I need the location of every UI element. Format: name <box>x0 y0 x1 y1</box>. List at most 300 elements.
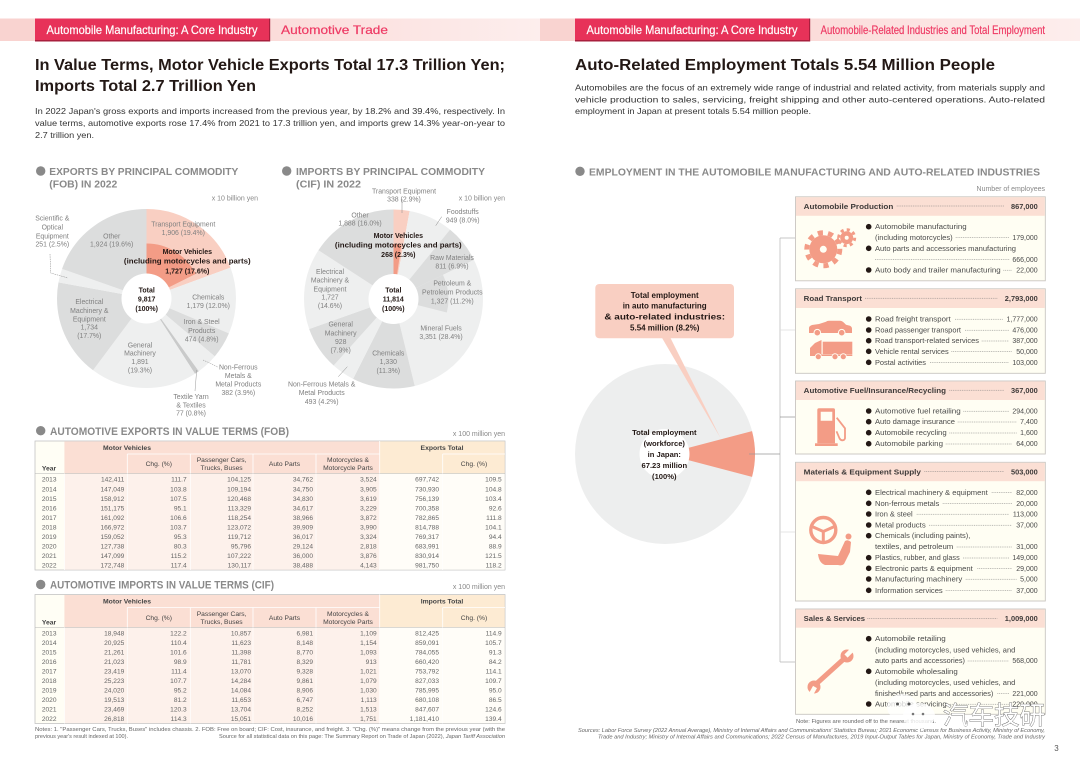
table: automotive exports: 172,748 <box>100 563 125 570</box>
icon: car <box>809 321 852 336</box>
watermark: 汽车技研 <box>943 702 1045 730</box>
table: automotive exports: 36,017 <box>293 534 313 541</box>
table: automotive imports: Trucks, Buses <box>201 619 243 626</box>
table: automotive imports: 1,030 <box>360 688 377 695</box>
table: automotive imports: 84.2 <box>489 659 502 666</box>
table: automotive exports: 814,788 <box>415 524 439 532</box>
table: automotive exports: 80.3 <box>174 544 187 551</box>
table: automotive imports: 6,747 <box>296 697 313 704</box>
table: automotive imports: Motor Vehicles <box>103 598 151 606</box>
table: automotive exports: 38,488 <box>293 563 313 570</box>
table: automotive imports: 1,113 <box>361 697 377 704</box>
unit: imports pie: x 10 billion yen <box>459 196 505 202</box>
table: automotive exports: 38,966 <box>293 515 313 522</box>
pie chart: exports: Scientific & <box>35 216 70 223</box>
table: automotive imports: 114.1 <box>486 669 502 676</box>
panel: road transport: 387,000 <box>1012 338 1038 345</box>
table: automotive imports: 18,948 <box>104 631 125 638</box>
connector lines to panels <box>749 238 795 662</box>
heading: automotive exports table <box>36 426 505 438</box>
panel: materials and equipment supply: Iron & steel <box>875 512 913 518</box>
intro text: right page: employment in Japan at present totals 5.54 million people. <box>575 107 811 116</box>
table: automotive imports: Year <box>42 619 57 626</box>
pie chart: imports: Petroleum Products <box>422 290 483 297</box>
table: automotive exports: 683,991 <box>415 544 439 551</box>
panel: sales and services: Automobile wholesaling <box>875 669 958 676</box>
table: automotive imports: 11,653 <box>231 697 251 704</box>
notes: left page: Notes: 1. "Passenger Cars, Trucks, Buses" includes chassis. 2. FOB: Free on board; CIF: Cost, insurance, and freight. 3. "Chg. (%)" means change from the previous year (with the <box>35 727 505 733</box>
pie chart: imports: (14.6%) <box>318 303 342 310</box>
table: automotive imports: 19,513 <box>104 697 125 704</box>
table: automotive exports: 121.5 <box>485 553 502 560</box>
table: automotive imports: Motorcycle Parts <box>323 619 374 626</box>
table: automotive imports: 10,857 <box>231 631 251 638</box>
table: automotive exports: 118.2 <box>486 563 502 570</box>
table: automotive exports: 2019 <box>42 534 57 541</box>
table: automotive imports: Auto Parts <box>269 615 301 622</box>
pie chart: exports: 1,924 (19.6%) <box>90 242 133 249</box>
heading: exports by principal commodity <box>36 166 238 190</box>
panel: materials and equipment supply: 37,000 <box>1016 522 1038 530</box>
table: automotive exports: 107.5 <box>170 496 187 503</box>
table: automotive exports: 111.7 <box>171 477 187 484</box>
heading: automotive imports table <box>36 580 505 592</box>
heading: employment section: EMPLOYMENT IN THE AUTOMOBILE MANUFACTURING AND AUTO-RELATED INDUSTRIES <box>589 166 1040 178</box>
table: automotive exports: 700,358 <box>415 505 439 512</box>
table: automotive exports: 161,092 <box>100 515 125 522</box>
table: automotive exports: 104.1 <box>485 524 502 532</box>
header band: left page: Automotive Trade <box>281 23 388 37</box>
pie chart: exports: Metal Products <box>215 381 262 388</box>
panel: road transport: Road freight transport <box>875 316 951 324</box>
table: automotive imports: 109.7 <box>485 678 502 685</box>
table: automotive exports: 95,796 <box>231 544 251 551</box>
unit: exports pie: x 10 billion yen <box>212 196 258 202</box>
table: automotive exports: 730,930 <box>415 486 439 493</box>
callout: auto employment total <box>595 284 734 438</box>
table: automotive exports: 2013 <box>42 477 57 484</box>
table: automotive exports: 107,222 <box>227 553 251 560</box>
panel: materials and equipment supply: Chemicals (including paints), <box>875 533 970 540</box>
panel: materials and equipment supply: Non-ferrous metals <box>875 501 940 508</box>
table: automotive exports: 2021 <box>42 553 57 560</box>
panel: automotive fuel, insurance, recycling: Automotive fuel retailing <box>875 408 961 416</box>
pie chart: exports: 382 (3.9%) <box>221 390 255 397</box>
panel: road transport: 476,000 <box>1012 328 1038 334</box>
table: automotive imports: 139.4 <box>485 716 502 723</box>
table: automotive exports: 120,468 <box>227 496 251 503</box>
icon: car seat <box>818 534 852 565</box>
title: left page: In Value Terms, Motor Vehicle Exports Total 17.3 Trillion Yen; <box>35 57 505 74</box>
pie chart: exports: 1,734 <box>81 325 98 332</box>
table: automotive imports: 2021 <box>42 707 57 714</box>
table: automotive imports: Imports Total <box>421 598 463 606</box>
table: automotive exports: 94.4 <box>489 534 502 541</box>
pie chart: imports: 1,727 <box>321 295 339 302</box>
table: automotive imports: 9,861 <box>296 678 313 685</box>
notes: left page <box>35 727 505 740</box>
table: automotive exports: Trucks, Buses <box>201 465 243 472</box>
table: automotive exports: 3,905 <box>360 486 377 493</box>
panel: automotive fuel, insurance, recycling: 1,600 <box>1020 430 1038 437</box>
panel: sales and services: 221,000 <box>1012 691 1038 698</box>
panel: road transport: 2,793,000 <box>1005 294 1038 303</box>
table: automotive imports: 91.3 <box>489 650 502 657</box>
table: automotive imports: 827,033 <box>415 678 439 685</box>
intro text: left page: value terms, automotive exports rose 17.4% from 2021 to 17.3 trillion yen, and imports grew 14.3% year-on-year to <box>35 119 505 128</box>
heading: exports by principal commodity: (FOB) IN 2022 <box>49 178 117 190</box>
pie chart: exports: Textile Yarn <box>173 394 209 401</box>
table: automotive exports: Chg. (%) <box>461 461 487 468</box>
table: automotive imports: 13,704 <box>231 707 251 714</box>
heading: automotive exports table: x 100 million yen <box>453 431 505 438</box>
pie chart: imports: Motor Vehicles <box>374 233 423 240</box>
table: automotive exports: 92.6 <box>489 505 502 512</box>
table: automotive exports: 34,762 <box>293 477 313 484</box>
panel: sales and services: (including motorcycles, used vehicles, and <box>875 648 1015 654</box>
table: automotive imports: 1,751 <box>360 716 377 723</box>
pie chart: imports: 811 (6.9%) <box>435 263 469 270</box>
page number: 3 <box>1054 744 1059 753</box>
pie chart: exports <box>35 216 262 418</box>
table: automotive imports: 111.4 <box>171 669 187 676</box>
pie chart: imports: 928 <box>335 339 347 346</box>
pie chart: imports: Mineral Fuels <box>420 326 462 333</box>
panel: automotive fuel, insurance, recycling: 64,000 <box>1016 441 1038 448</box>
panel: materials and equipment supply: 20,000 <box>1016 501 1038 508</box>
panel: automobile production: (including motorcycles) <box>875 235 953 242</box>
panel: automobile production: Automobile Production <box>804 202 894 211</box>
pie chart: total employment: (workforce) <box>644 439 685 448</box>
table: automotive exports: 3,524 <box>360 477 377 484</box>
table: automotive imports: 98.9 <box>174 659 187 666</box>
panel: materials and equipment supply: Electronic parts & equipment <box>875 566 973 573</box>
table: automotive exports: 103.7 <box>170 524 187 532</box>
pie chart: imports: Chemicals <box>372 351 405 358</box>
table: automotive exports: 34,830 <box>293 496 313 503</box>
table: automotive exports: 123,072 <box>227 524 251 532</box>
table: automotive imports: 86.5 <box>489 697 502 704</box>
pie chart: imports: 1,888 (16.0%) <box>338 221 382 228</box>
notes: right page: Note: Figures are rounded off to the nearest thousand. <box>796 719 936 725</box>
table: automotive exports: 119,712 <box>228 534 251 541</box>
panel: materials and equipment supply: 37,000 <box>1016 588 1038 595</box>
table: automotive exports: 3,876 <box>360 553 377 560</box>
table: automotive imports: 1,513 <box>360 707 377 714</box>
panel: road transport: Road transport-related services <box>875 338 980 345</box>
table: automotive imports: 26,818 <box>104 716 125 723</box>
table: automotive exports: 39,909 <box>293 524 313 532</box>
table: automotive exports: 117.4 <box>171 563 187 570</box>
table: automotive exports: 2017 <box>42 515 57 522</box>
table: automotive exports: 127,738 <box>100 544 125 551</box>
table: automotive imports: 847,607 <box>415 707 439 714</box>
table: automotive imports: 10,016 <box>293 716 313 723</box>
pie chart: exports: (17.7%) <box>77 333 101 340</box>
panel: sales and services: Sales & Services <box>804 614 865 623</box>
table: automotive exports: 151,175 <box>100 505 125 512</box>
pie chart: imports: 1,330 <box>380 359 397 366</box>
pie chart: imports: (including motorcycles and parts) <box>335 242 462 249</box>
panel: automobile production: Automobile manufacturing <box>875 224 967 231</box>
pie chart: exports: General <box>128 342 153 349</box>
table: automotive imports: 1,093 <box>360 650 377 657</box>
pie chart: exports: Motor Vehicles <box>163 249 212 256</box>
table: automotive imports: 15,051 <box>231 716 251 723</box>
table: automotive exports: 95.1 <box>174 505 187 512</box>
panel: road transport: Vehicle rental services <box>875 349 949 356</box>
heading: imports by principal commodity: (CIF) IN 2022 <box>296 178 361 190</box>
panel: sales and services <box>796 609 1045 714</box>
icon: gears <box>807 230 855 266</box>
intro text: right page <box>575 84 1046 116</box>
notes: left page: previous year's result indexed at 100). <box>35 734 128 740</box>
table: automotive exports: 3,229 <box>360 505 377 512</box>
table: automotive imports: 25,223 <box>104 678 125 685</box>
table: automotive exports: 104,125 <box>227 477 251 484</box>
pie chart: imports: (11.3%) <box>376 368 400 375</box>
pie chart: exports: Machinery <box>124 351 156 358</box>
panel: road transport: Road Transport <box>804 294 863 303</box>
pie chart: exports: 474 (4.8%) <box>185 336 219 343</box>
table: automotive imports: 81.2 <box>174 697 187 704</box>
panel: sales and services: 1,009,000 <box>1005 614 1038 623</box>
table: automotive imports: 13,070 <box>231 669 251 676</box>
table: automotive exports: 3,324 <box>360 534 377 541</box>
table: automotive exports: 34,750 <box>293 486 313 493</box>
panel: road transport: 1,777,000 <box>1007 316 1038 324</box>
pie chart: imports: Raw Materials <box>430 255 474 262</box>
table: automotive exports: 118,254 <box>228 515 251 522</box>
panel: automobile production: 179,000 <box>1012 235 1038 242</box>
heading: automotive exports table: AUTOMOTIVE EXPORTS IN VALUE TERMS (FOB) <box>50 426 289 438</box>
panel: sales and services: 220,000 <box>1012 702 1038 708</box>
panel: materials and equipment supply: Plastics, rubber, and glass <box>875 555 960 562</box>
title: right page: Auto-Related Employment Totals 5.54 Million People <box>575 57 995 74</box>
table: automotive imports: 95.0 <box>489 688 502 695</box>
title: left page <box>35 57 505 95</box>
table: automotive imports: 114.3 <box>171 716 187 723</box>
heading: imports by principal commodity <box>282 166 485 190</box>
table: automotive imports: 2022 <box>42 716 57 723</box>
pie chart: imports: (7.9%) <box>331 347 351 354</box>
panel: automotive fuel, insurance, recycling: Automotive Fuel/Insurance/Recycling <box>804 386 947 395</box>
table: automotive imports: 1,021 <box>360 669 377 676</box>
pie chart: imports: Non-Ferrous Metals & <box>288 381 356 388</box>
table: automotive imports: 114.9 <box>486 631 502 638</box>
pie chart: total employment: in Japan: <box>648 450 681 459</box>
pie chart: exports: 1,891 <box>131 359 149 366</box>
panel: materials and equipment supply: 5,000 <box>1020 576 1038 584</box>
table: automotive exports: 769,317 <box>415 534 439 541</box>
pie chart: imports: Electrical <box>316 269 344 276</box>
table: automotive imports: 21,023 <box>104 659 125 666</box>
intro text: left page <box>35 107 505 140</box>
callout: auto employment total: in auto manufacturing <box>623 302 707 311</box>
heading: imports by principal commodity: IMPORTS BY PRINCIPAL COMMODITY <box>296 166 485 178</box>
panel: materials and equipment supply: Electrical machinery & equipment <box>875 490 988 497</box>
table: automotive imports: 2017 <box>42 669 57 676</box>
table: automotive exports: 115.2 <box>171 553 187 560</box>
table: automotive imports: 120.3 <box>170 707 187 714</box>
panel: materials and equipment supply: Information services <box>875 588 943 595</box>
pie chart: imports: Petroleum & <box>433 281 472 288</box>
notes: right page: Sources: Labor Force Survey (2022 Annual Average), Ministry of Internal Affairs and Communications' Statistics Bureau; 2021 Economic Census for Business Activity, Ministry of Economy, <box>578 728 1045 734</box>
table: automotive exports: 981,750 <box>415 563 439 570</box>
pie chart: exports: Metals & <box>225 373 252 380</box>
table: automotive imports: 8,148 <box>296 640 313 647</box>
table: automotive imports: 2013 <box>42 631 57 638</box>
table: automotive imports: 122.2 <box>170 631 187 638</box>
panel: sales and services: (including motorcycles, used vehicles, and <box>875 680 1015 687</box>
pie chart: total employment: 67.23 million <box>642 461 687 470</box>
table: automotive imports: 2020 <box>42 697 57 704</box>
pie chart: imports: Metal Products <box>299 390 345 397</box>
panel: automotive fuel, insurance, recycling: 7,400 <box>1020 419 1038 426</box>
table: automotive imports: 23,469 <box>104 707 125 714</box>
table: automotive exports: 106.6 <box>170 515 187 522</box>
pie chart: exports: Products <box>188 328 216 335</box>
table: automotive exports: Year <box>42 466 57 472</box>
panel: sales and services: Automobile retailing <box>875 636 946 643</box>
pie chart: exports: Non-Ferrous <box>219 365 258 372</box>
header band: right page <box>540 18 1080 42</box>
table: automotive exports: 2015 <box>42 496 57 503</box>
pie chart: imports: Total <box>385 288 401 294</box>
icon: wrench <box>808 649 854 696</box>
table: automotive imports: 785,995 <box>415 688 439 695</box>
table: automotive exports: 697,742 <box>415 477 439 484</box>
table: automotive exports: 95.3 <box>174 534 187 541</box>
table: automotive imports: 105.7 <box>485 640 502 647</box>
table: automotive exports: 111.8 <box>486 515 502 522</box>
table: automotive imports: Passenger Cars, <box>197 611 247 618</box>
table: automotive imports: 8,329 <box>296 659 313 666</box>
heading: automotive imports table: x 100 million yen <box>453 584 505 591</box>
header band: left page <box>0 18 540 42</box>
pie chart: imports: 3,351 (28.4%) <box>419 334 463 341</box>
table: automotive exports: 2014 <box>42 486 57 493</box>
table: automotive imports: 913 <box>366 659 377 666</box>
header band: left page: Automobile Manufacturing: A Core Industry <box>46 23 258 37</box>
pie chart: imports: General <box>328 322 353 329</box>
table: automotive imports: 2016 <box>42 659 57 666</box>
pie chart: exports: Equipment <box>36 233 69 240</box>
panel: road transport: Road passenger transport <box>875 328 961 334</box>
icon: steering wheel <box>811 518 836 542</box>
pie chart: imports: 11,814 <box>383 297 404 304</box>
pie chart: imports: (100%) <box>382 306 405 313</box>
table: automotive exports: 2018 <box>42 524 57 532</box>
pie chart: exports: (19.3%) <box>128 367 152 374</box>
pie chart: exports: 1,906 (19.4%) <box>162 230 205 237</box>
icon: truck <box>810 340 852 360</box>
panel: automotive fuel, insurance, recycling: 367,000 <box>1011 386 1038 395</box>
table: automotive exports: 166,972 <box>100 524 125 532</box>
table: automotive imports: 8,252 <box>296 707 313 714</box>
panel: materials and equipment supply <box>796 462 1045 601</box>
pie chart: total employment: Total employment <box>632 428 697 437</box>
panel: automobile production: Auto parts and accessories manufacturing <box>875 246 1016 253</box>
table: automotive imports: Chg. (%) <box>146 615 172 622</box>
pie chart: exports: (including motorcycles and parts) <box>124 258 251 266</box>
pie chart: imports: Transport Equipment <box>372 188 436 195</box>
pie chart: exports: 1,179 (12.0%) <box>187 303 230 310</box>
panel: materials and equipment supply: 31,000 <box>1016 544 1038 551</box>
panel: sales and services: finished/used parts and accessories) <box>875 691 993 698</box>
unit: number of employees: Number of employees <box>977 186 1045 193</box>
intro text: left page: 2.7 trillion yen. <box>35 131 94 140</box>
panel: materials and equipment supply: 29,000 <box>1016 566 1038 573</box>
table: automotive imports: 11,623 <box>231 640 251 647</box>
table: automotive exports: 2020 <box>42 544 57 551</box>
table: automotive imports: 24,020 <box>104 688 125 695</box>
table: automotive imports: 2018 <box>42 678 57 685</box>
table: automotive exports: 159,052 <box>100 534 125 541</box>
pie chart: imports <box>288 188 483 406</box>
pie chart: exports: Transport Equipment <box>151 222 215 228</box>
table: automotive exports: 756,139 <box>415 496 439 503</box>
table: automotive exports: 2022 <box>42 563 57 570</box>
table: automotive exports: 29,124 <box>293 544 313 551</box>
panel: materials and equipment supply: 82,000 <box>1016 490 1038 497</box>
callout: auto employment total: 5.54 million (8.2%) <box>630 323 700 332</box>
panel: materials and equipment supply: 503,000 <box>1011 468 1038 476</box>
notes: right page: Trade and Industry; Ministry of Internal Affairs and Communications; 2022 Census of Manufactures, 2019 Input-Output Tables for Japan, Ministry of Economy, Trade and Industry <box>598 735 1045 741</box>
table: automotive imports: 110.4 <box>171 640 187 647</box>
pie chart: imports: 493 (4.2%) <box>305 399 339 406</box>
table: automotive imports: 1,079 <box>360 678 377 685</box>
pie chart: exports: Total <box>139 288 155 294</box>
table: automotive exports <box>35 441 505 570</box>
table: automotive exports: 3,619 <box>360 496 377 503</box>
table: automotive imports: 14,084 <box>231 688 251 695</box>
pie chart: imports: 949 (8.0%) <box>446 217 480 224</box>
panel: automobile production <box>796 197 1045 281</box>
intro text: right page: vehicle production to sales, servicing, freight shipping and other auto-centered operations. Auto-related <box>575 95 1046 104</box>
pie chart: exports: Iron & Steel <box>184 319 220 326</box>
panel: sales and services: Automobile servicing <box>875 702 947 708</box>
pie chart: exports: Equipment <box>73 316 106 323</box>
pie chart: imports: Machinery <box>325 331 357 338</box>
table: automotive imports: 23,419 <box>104 669 125 676</box>
pie chart: exports: Machinery & <box>70 308 109 315</box>
panel: materials and equipment supply: 149,000 <box>1012 555 1038 562</box>
pie chart: exports: 1,727 (17.6%) <box>165 268 209 275</box>
pie chart: imports: Machinery & <box>311 277 350 284</box>
panel: road transport: 103,000 <box>1012 360 1038 367</box>
panel: materials and equipment supply: textiles, and petroleum <box>875 544 953 551</box>
heading: exports by principal commodity: EXPORTS BY PRINCIPAL COMMODITY <box>49 166 238 178</box>
table: automotive exports: Exports Total <box>421 445 464 452</box>
watermark <box>887 694 1045 730</box>
panel: automotive fuel, insurance, recycling: Automobile parking <box>875 441 943 448</box>
table: automotive exports: 88.9 <box>489 544 502 551</box>
table: automotive exports: Passenger Cars, <box>197 457 247 464</box>
pie chart: exports: & Textiles <box>176 402 206 409</box>
table: automotive imports: 660,420 <box>415 659 439 666</box>
pie chart: exports: Other <box>103 233 121 240</box>
table: automotive imports: 753,792 <box>415 669 439 676</box>
table: automotive exports: 130,117 <box>228 563 251 570</box>
table: automotive imports: 6,981 <box>296 631 313 638</box>
table: automotive exports: 147,049 <box>100 486 125 493</box>
table: automotive imports: 124.6 <box>485 707 502 714</box>
table: automotive imports: 107.7 <box>170 678 187 685</box>
panel: automotive fuel, insurance, recycling: Auto damage insurance <box>875 419 955 426</box>
pie chart: imports: 1,327 (11.2%) <box>431 298 474 305</box>
table: automotive imports: 1,154 <box>360 640 377 647</box>
